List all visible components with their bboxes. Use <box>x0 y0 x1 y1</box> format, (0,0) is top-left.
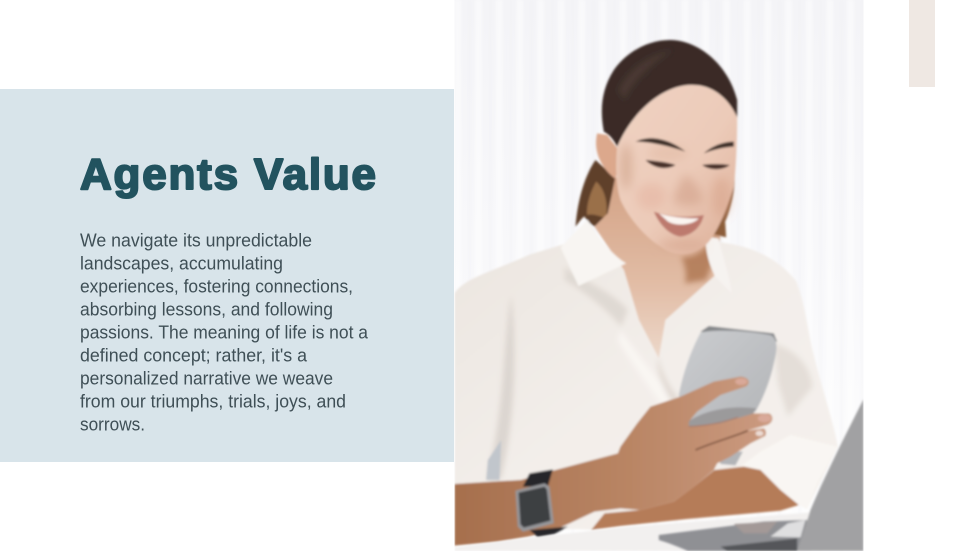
body text: sorrows. <box>80 414 145 434</box>
laptop screen <box>797 399 863 551</box>
shirt <box>454 220 838 530</box>
keyboard <box>720 538 797 551</box>
panel: text background <box>0 89 454 462</box>
photo: woman using a phone at a laptop <box>454 0 863 551</box>
hair <box>602 40 737 147</box>
finger details <box>689 378 771 450</box>
eyebrows <box>635 138 734 153</box>
eyes <box>645 160 730 169</box>
left forearm and hand <box>454 377 772 546</box>
watch <box>515 469 568 537</box>
mouth <box>654 212 704 237</box>
collar <box>560 220 732 293</box>
body text: passions. The meaning of life is not a <box>80 322 369 342</box>
photo backdrop: striped curtain <box>454 0 864 302</box>
sleeve fold shadow <box>486 440 501 480</box>
body text: personalized narrative we weave <box>80 368 333 388</box>
body text: from our triumphs, trials, joys, and <box>80 392 346 412</box>
ponytail <box>575 160 618 227</box>
right hair strand <box>699 170 735 248</box>
face shading <box>620 143 730 250</box>
hair highlight <box>620 56 658 95</box>
shirt shading <box>488 267 813 480</box>
body text: defined concept; rather, it's a <box>80 346 308 366</box>
phone <box>679 326 777 465</box>
face <box>616 85 737 254</box>
heading: Agents Value <box>80 150 376 199</box>
right forearm <box>591 467 799 530</box>
body text <box>80 230 369 434</box>
decorative accent block <box>909 0 935 87</box>
ear <box>596 133 621 179</box>
body text: We navigate its unpredictable <box>80 230 312 250</box>
table <box>454 512 810 551</box>
neck <box>594 177 721 358</box>
body text: absorbing lessons, and following <box>80 300 333 320</box>
body text: landscapes, accumulating <box>80 254 283 274</box>
laptop <box>659 399 863 551</box>
laptop base <box>659 520 807 551</box>
shirt cuff <box>752 469 798 506</box>
body text: experiences, fostering connections, <box>80 276 353 296</box>
nose <box>674 173 703 206</box>
figure <box>454 40 838 546</box>
